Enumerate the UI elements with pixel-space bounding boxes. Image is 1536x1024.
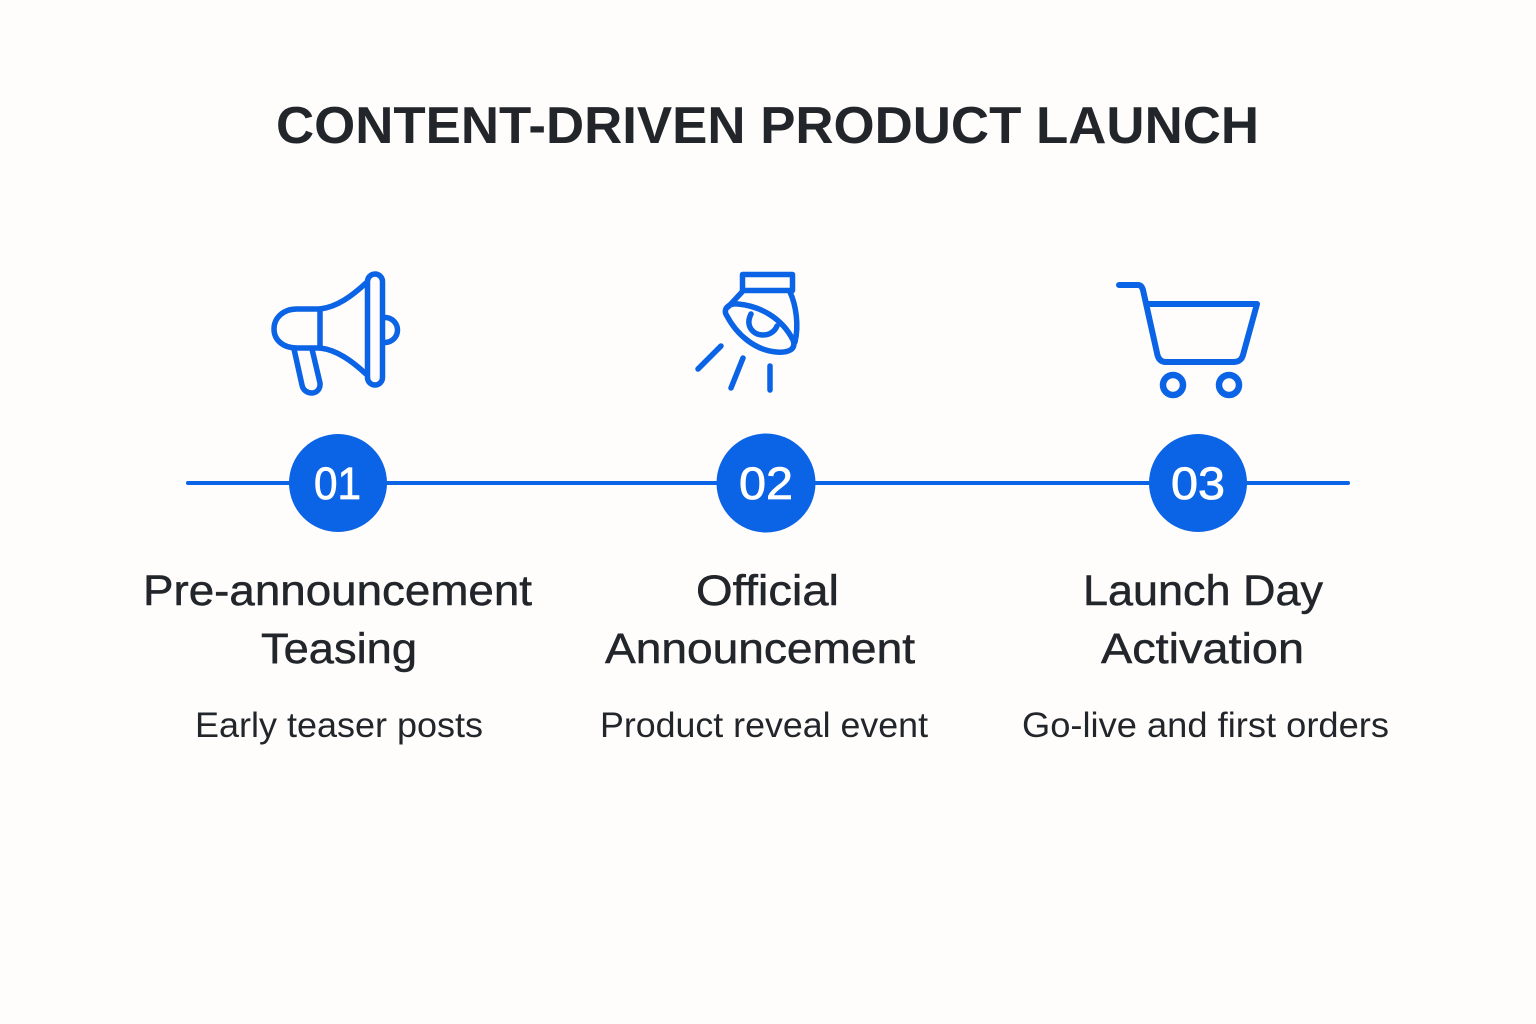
step 1 text: Teasing: [261, 625, 417, 673]
step 3 text: Launch Day: [1083, 567, 1324, 615]
step 2 text: Product reveal event: [600, 706, 928, 745]
step 3 text: Go-live and first orders: [1022, 706, 1389, 745]
step 2 marker: [716, 434, 816, 532]
icon: spotlight: [698, 274, 797, 390]
step 2 text: [600, 567, 928, 745]
step 3 text: [1022, 567, 1389, 745]
step 1 marker: 01: [314, 458, 361, 509]
step 1 text: Early teaser posts: [195, 706, 483, 745]
title: CONTENT-DRIVEN PRODUCT LAUNCH: [276, 97, 1259, 155]
timeline line: [188, 481, 1348, 485]
step 2 text: Announcement: [605, 625, 915, 673]
step 1 text: Pre-announcement: [143, 567, 532, 615]
step 1 marker: [289, 434, 387, 532]
step 2 marker: 02: [739, 458, 793, 509]
step 3 marker: 03: [1171, 458, 1225, 509]
step 3 marker: [1149, 434, 1247, 532]
step 1 text: [143, 567, 532, 745]
step 3 text: Activation: [1101, 625, 1304, 673]
icon: shopping cart: [1119, 285, 1257, 395]
step 2 text: Official: [696, 567, 839, 615]
icon: megaphone: [274, 274, 398, 393]
